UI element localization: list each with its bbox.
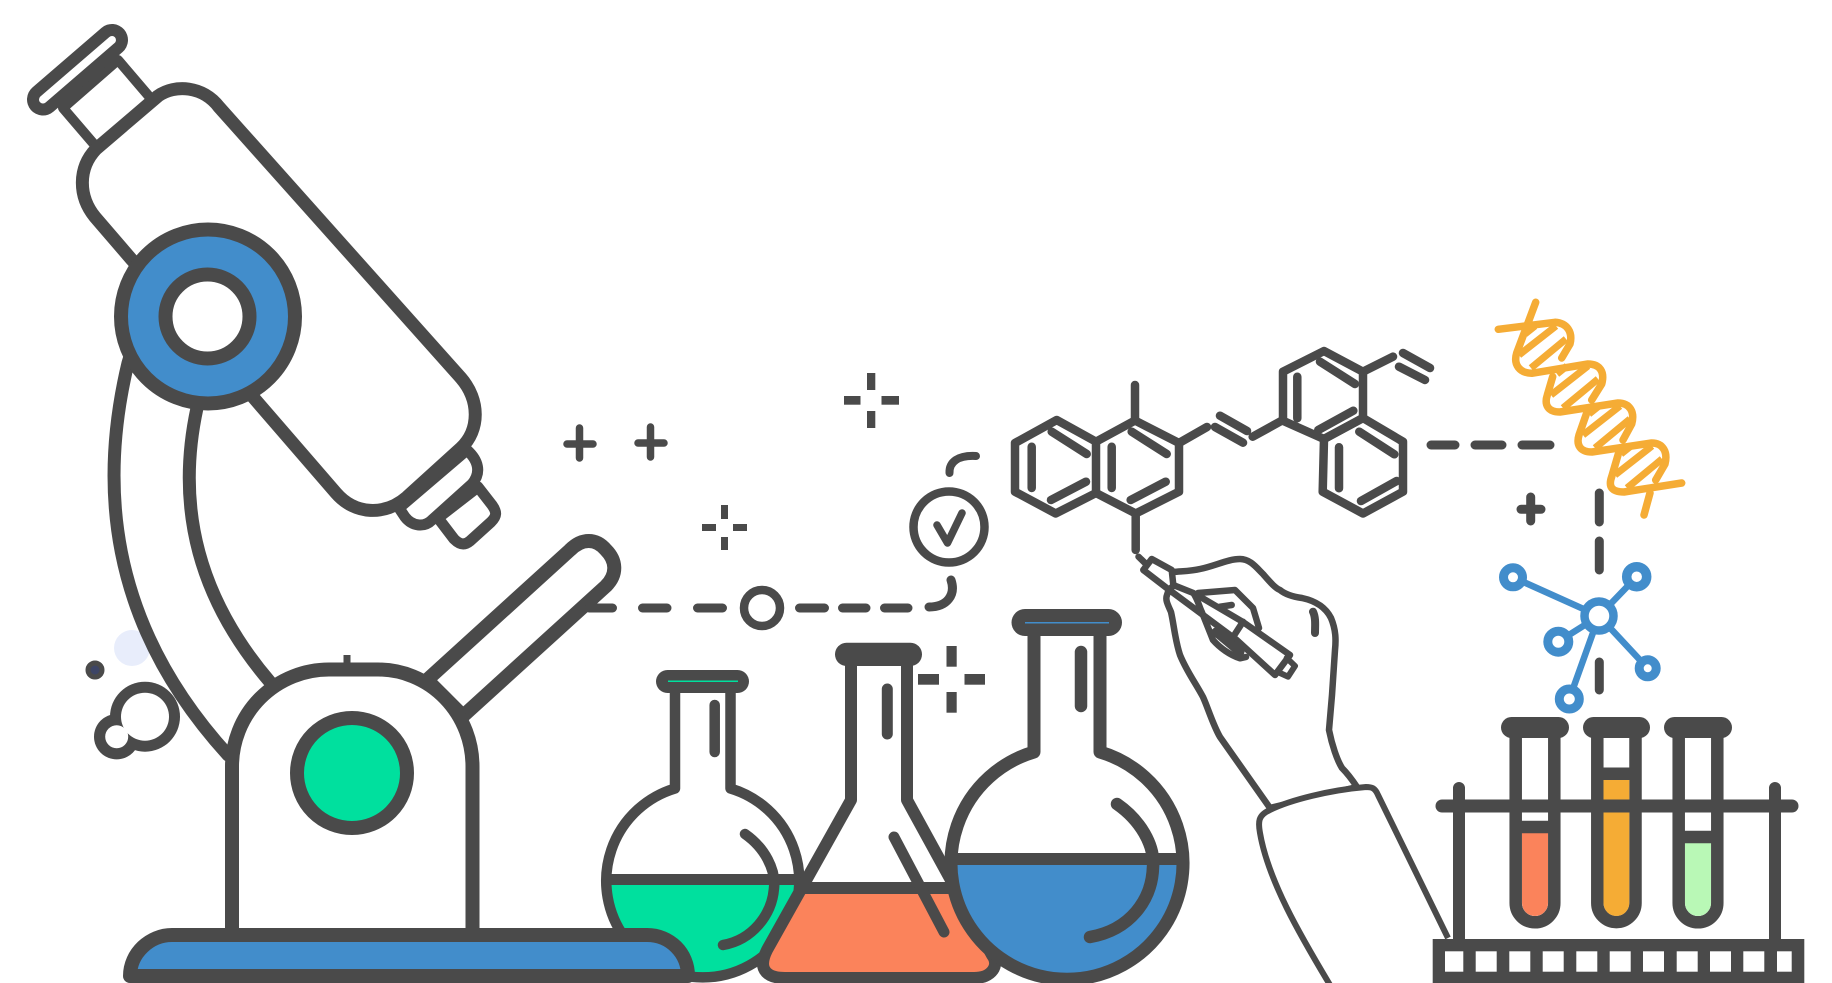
plus signs xyxy=(567,427,664,458)
hand holding a pen xyxy=(1138,557,1448,983)
eyepiece neck xyxy=(63,60,153,150)
round flask: blue xyxy=(951,609,1183,979)
hand outline xyxy=(1166,559,1357,808)
rack crossbar xyxy=(1442,800,1792,812)
helix hatching xyxy=(1519,326,1662,488)
orange test tube xyxy=(1501,717,1569,922)
focus knob xyxy=(121,230,295,404)
dashed connectors on the right xyxy=(1431,445,1599,690)
plus sign by molecule xyxy=(1521,497,1541,521)
blue molecule xyxy=(1504,567,1656,709)
bubbles beside microscope xyxy=(88,630,180,759)
rack posts xyxy=(1459,788,1775,942)
glass highlights xyxy=(1081,652,1153,937)
flask outline xyxy=(763,660,995,978)
round flask: green xyxy=(606,670,799,977)
eyepiece cap xyxy=(43,40,112,100)
microscope arm xyxy=(114,340,270,755)
liquid level xyxy=(606,874,799,885)
helix strands xyxy=(1498,302,1682,515)
flask outline xyxy=(951,630,1183,979)
green liquid xyxy=(606,880,799,977)
orange liquid xyxy=(763,888,995,978)
rack base xyxy=(1433,939,1804,983)
liquid level xyxy=(951,853,1183,865)
glass highlights xyxy=(887,689,944,932)
check mark badge xyxy=(914,492,984,562)
yellow test tube xyxy=(1583,717,1650,922)
flask lip xyxy=(656,670,749,693)
flask glass xyxy=(606,682,799,977)
pen and fingers xyxy=(1138,557,1315,677)
dashed path with circle xyxy=(589,456,976,626)
chemical structure xyxy=(1015,351,1430,550)
blue liquid xyxy=(951,859,1183,977)
test tube rack xyxy=(1433,717,1804,983)
light green test tube xyxy=(1664,717,1732,922)
DNA helix xyxy=(1498,302,1682,515)
microscope body tube xyxy=(82,89,475,510)
stage handle xyxy=(427,541,614,716)
glass highlights xyxy=(715,705,774,945)
flask lip xyxy=(1012,609,1122,636)
sleeve cuff xyxy=(1259,787,1448,983)
flask outline xyxy=(606,682,799,977)
flask glass xyxy=(763,660,995,978)
sparkles xyxy=(702,373,985,713)
microscope xyxy=(43,40,614,936)
conical flask: orange xyxy=(763,643,995,978)
flask lip xyxy=(835,643,922,666)
microscope pillar xyxy=(232,655,473,936)
liquid level xyxy=(803,882,958,894)
flask glass xyxy=(951,630,1183,979)
objective lenses xyxy=(399,450,496,544)
microscope base xyxy=(130,935,688,976)
